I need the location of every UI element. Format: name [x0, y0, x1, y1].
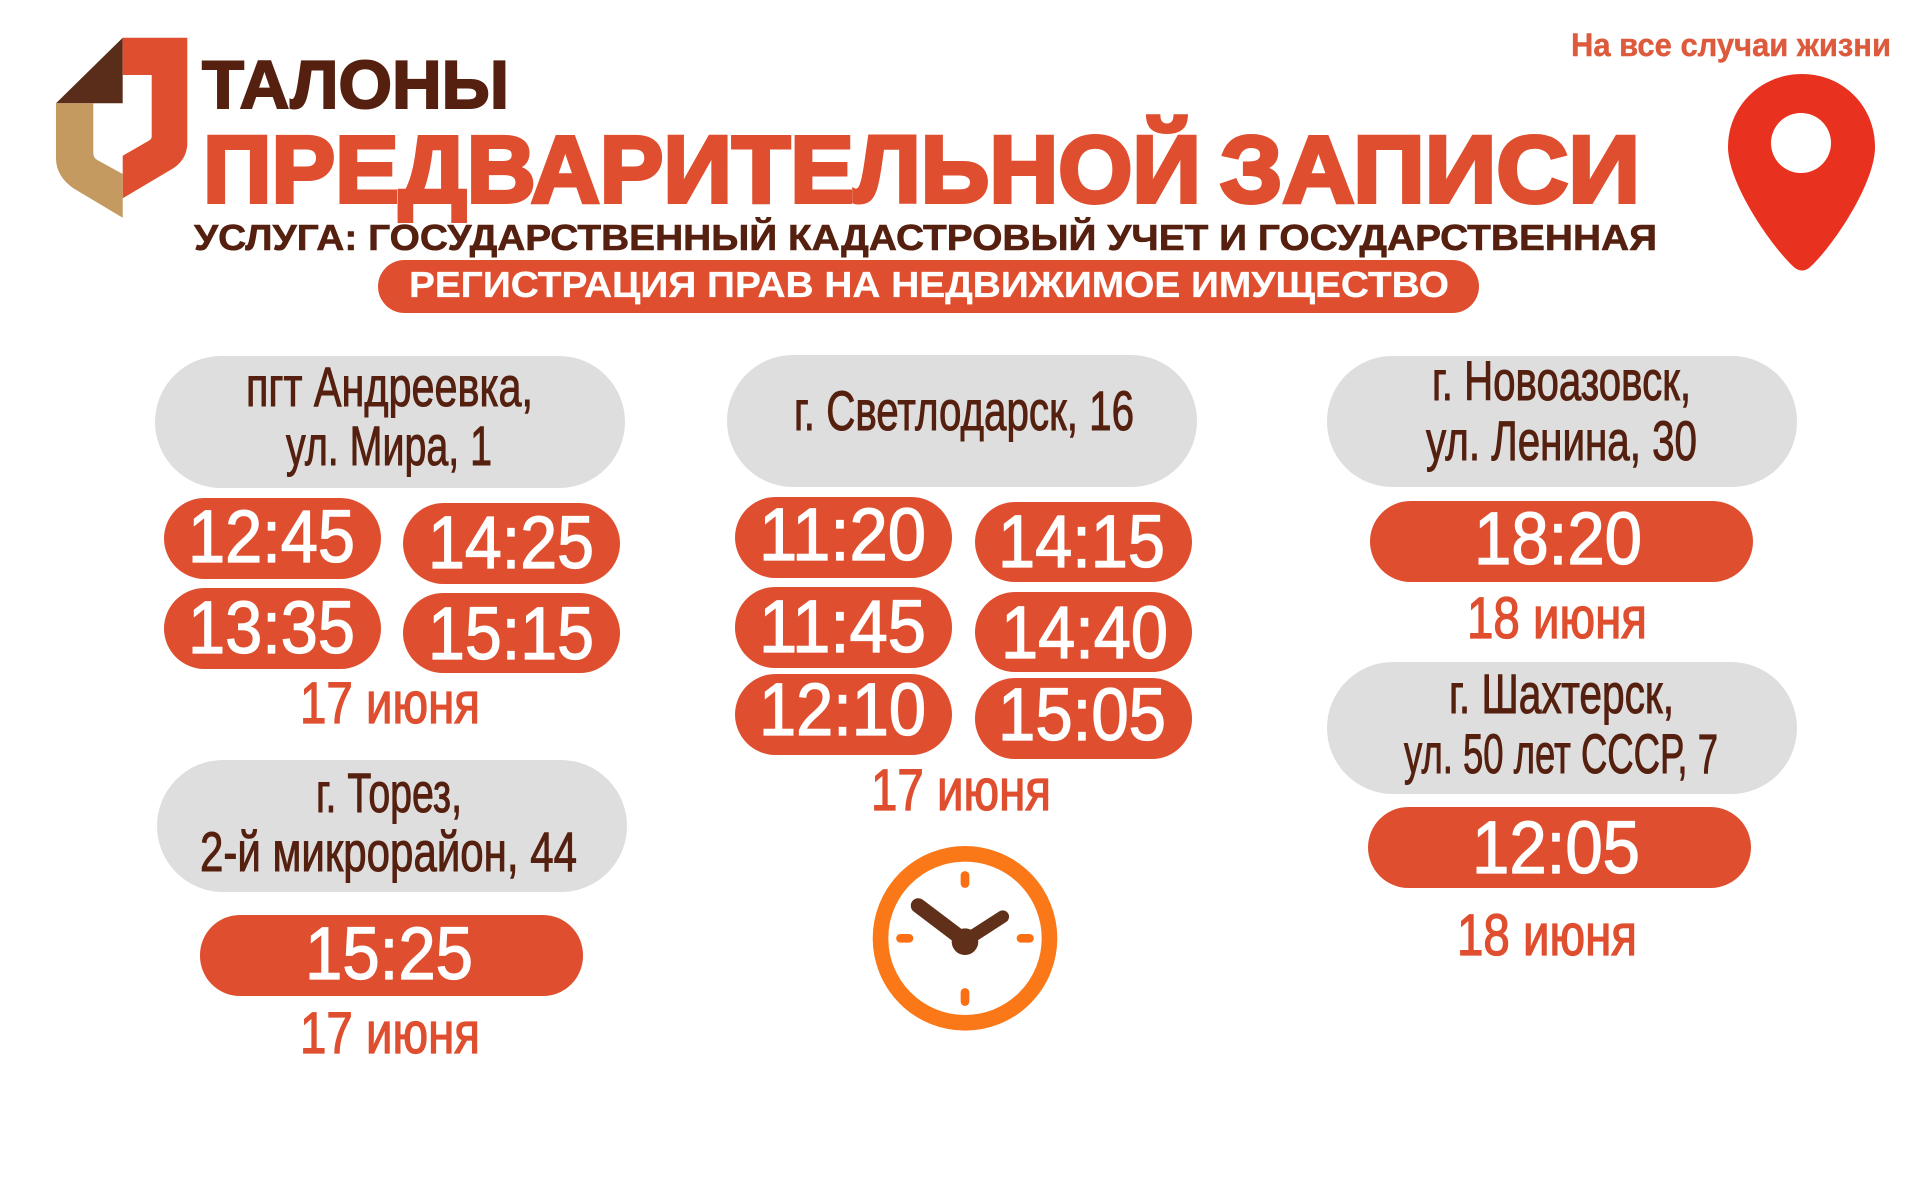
panel: Andreevka — [155, 355, 625, 736]
date: 17 June: 17 июня — [871, 758, 1051, 823]
address pill: Shakhtersk — [1327, 662, 1797, 794]
address pill: Torez: 2-й микрорайон, 44 — [200, 820, 577, 883]
time slot 15:05: 15:05 — [998, 673, 1166, 756]
panel: Svetlodarsk — [727, 355, 1197, 823]
heading: pre-registration — [203, 116, 1640, 223]
heading: talons: ТАЛОНЫ — [202, 47, 509, 123]
time slot 14:15: 14:15 — [998, 500, 1165, 583]
panel: Torez — [157, 760, 627, 1066]
icon: clock — [880, 854, 1050, 1023]
address pill: Svetlodarsk: г. Светлодарск, 16 — [794, 379, 1134, 442]
address pill: Andreevka: пгт Андреевка, — [246, 355, 533, 418]
subtitle: service: УСЛУГА: ГОСУДАРСТВЕННЫЙ КАДАСТРОВЫЙ УЧЕТ И ГОСУДАРСТВЕННАЯ — [194, 216, 1657, 258]
address pill: Torez: г. Торез, — [316, 761, 462, 824]
address pill: Shakhtersk: ул. 50 лет СССР, 7 — [1404, 722, 1718, 785]
address pill: Shakhtersk: г. Шахтерск, — [1449, 662, 1674, 725]
address pill: Andreevka: ул. Мира, 1 — [286, 414, 492, 477]
icon: location pin — [1728, 74, 1875, 270]
address pill: Novoazovsk: г. Новоазовск, — [1432, 349, 1691, 412]
address pill: Novoazovsk — [1327, 349, 1797, 487]
time slot 11:45: 11:45 — [759, 585, 926, 668]
icon: shield logo — [56, 38, 187, 218]
time slot 14:25: 14:25 — [428, 501, 594, 584]
panel: Novoazovsk — [1327, 349, 1797, 651]
heading: pre-registration: ПРЕДВАРИТЕЛЬНОЙ — [203, 116, 1201, 223]
time slot 18:20 — [1370, 497, 1753, 582]
slogan: На все случаи жизни — [1571, 27, 1891, 63]
date: 17 June: 17 июня — [300, 1001, 480, 1066]
date: 17 June: 17 июня — [300, 671, 480, 736]
time slot 13:35: 13:35 — [188, 586, 355, 669]
time slot 14:40: 14:40 — [1001, 591, 1168, 674]
time slot 12:05 — [1368, 806, 1751, 889]
heading: pre-registration: ЗАПИСИ — [1220, 117, 1640, 223]
time slot 15:15: 15:15 — [428, 592, 594, 675]
time slot 15:25 — [200, 912, 583, 996]
time slot 12:10: 12:10 — [759, 668, 926, 751]
address pill: Torez — [157, 760, 627, 892]
address pill: Andreevka — [155, 355, 625, 488]
subtitle banner: registration of rights: РЕГИСТРАЦИЯ ПРАВ НА НЕДВИЖИМОЕ ИМУЩЕСТВО — [409, 264, 1449, 305]
date: 18 June: 18 июня — [1457, 903, 1637, 968]
time slot 18:20: 18:20 — [1474, 497, 1642, 580]
time slot 15:25: 15:25 — [305, 912, 473, 995]
panel: Shakhtersk — [1327, 662, 1797, 968]
time slot 12:05: 12:05 — [1472, 806, 1640, 889]
address pill: Svetlodarsk — [727, 355, 1197, 487]
date: 18 June: 18 июня — [1467, 586, 1647, 651]
time slot 11:20: 11:20 — [759, 493, 926, 576]
time slot 12:45: 12:45 — [188, 495, 355, 578]
subtitle banner: registration of rights — [378, 260, 1479, 313]
address pill: Novoazovsk: ул. Ленина, 30 — [1426, 409, 1697, 472]
